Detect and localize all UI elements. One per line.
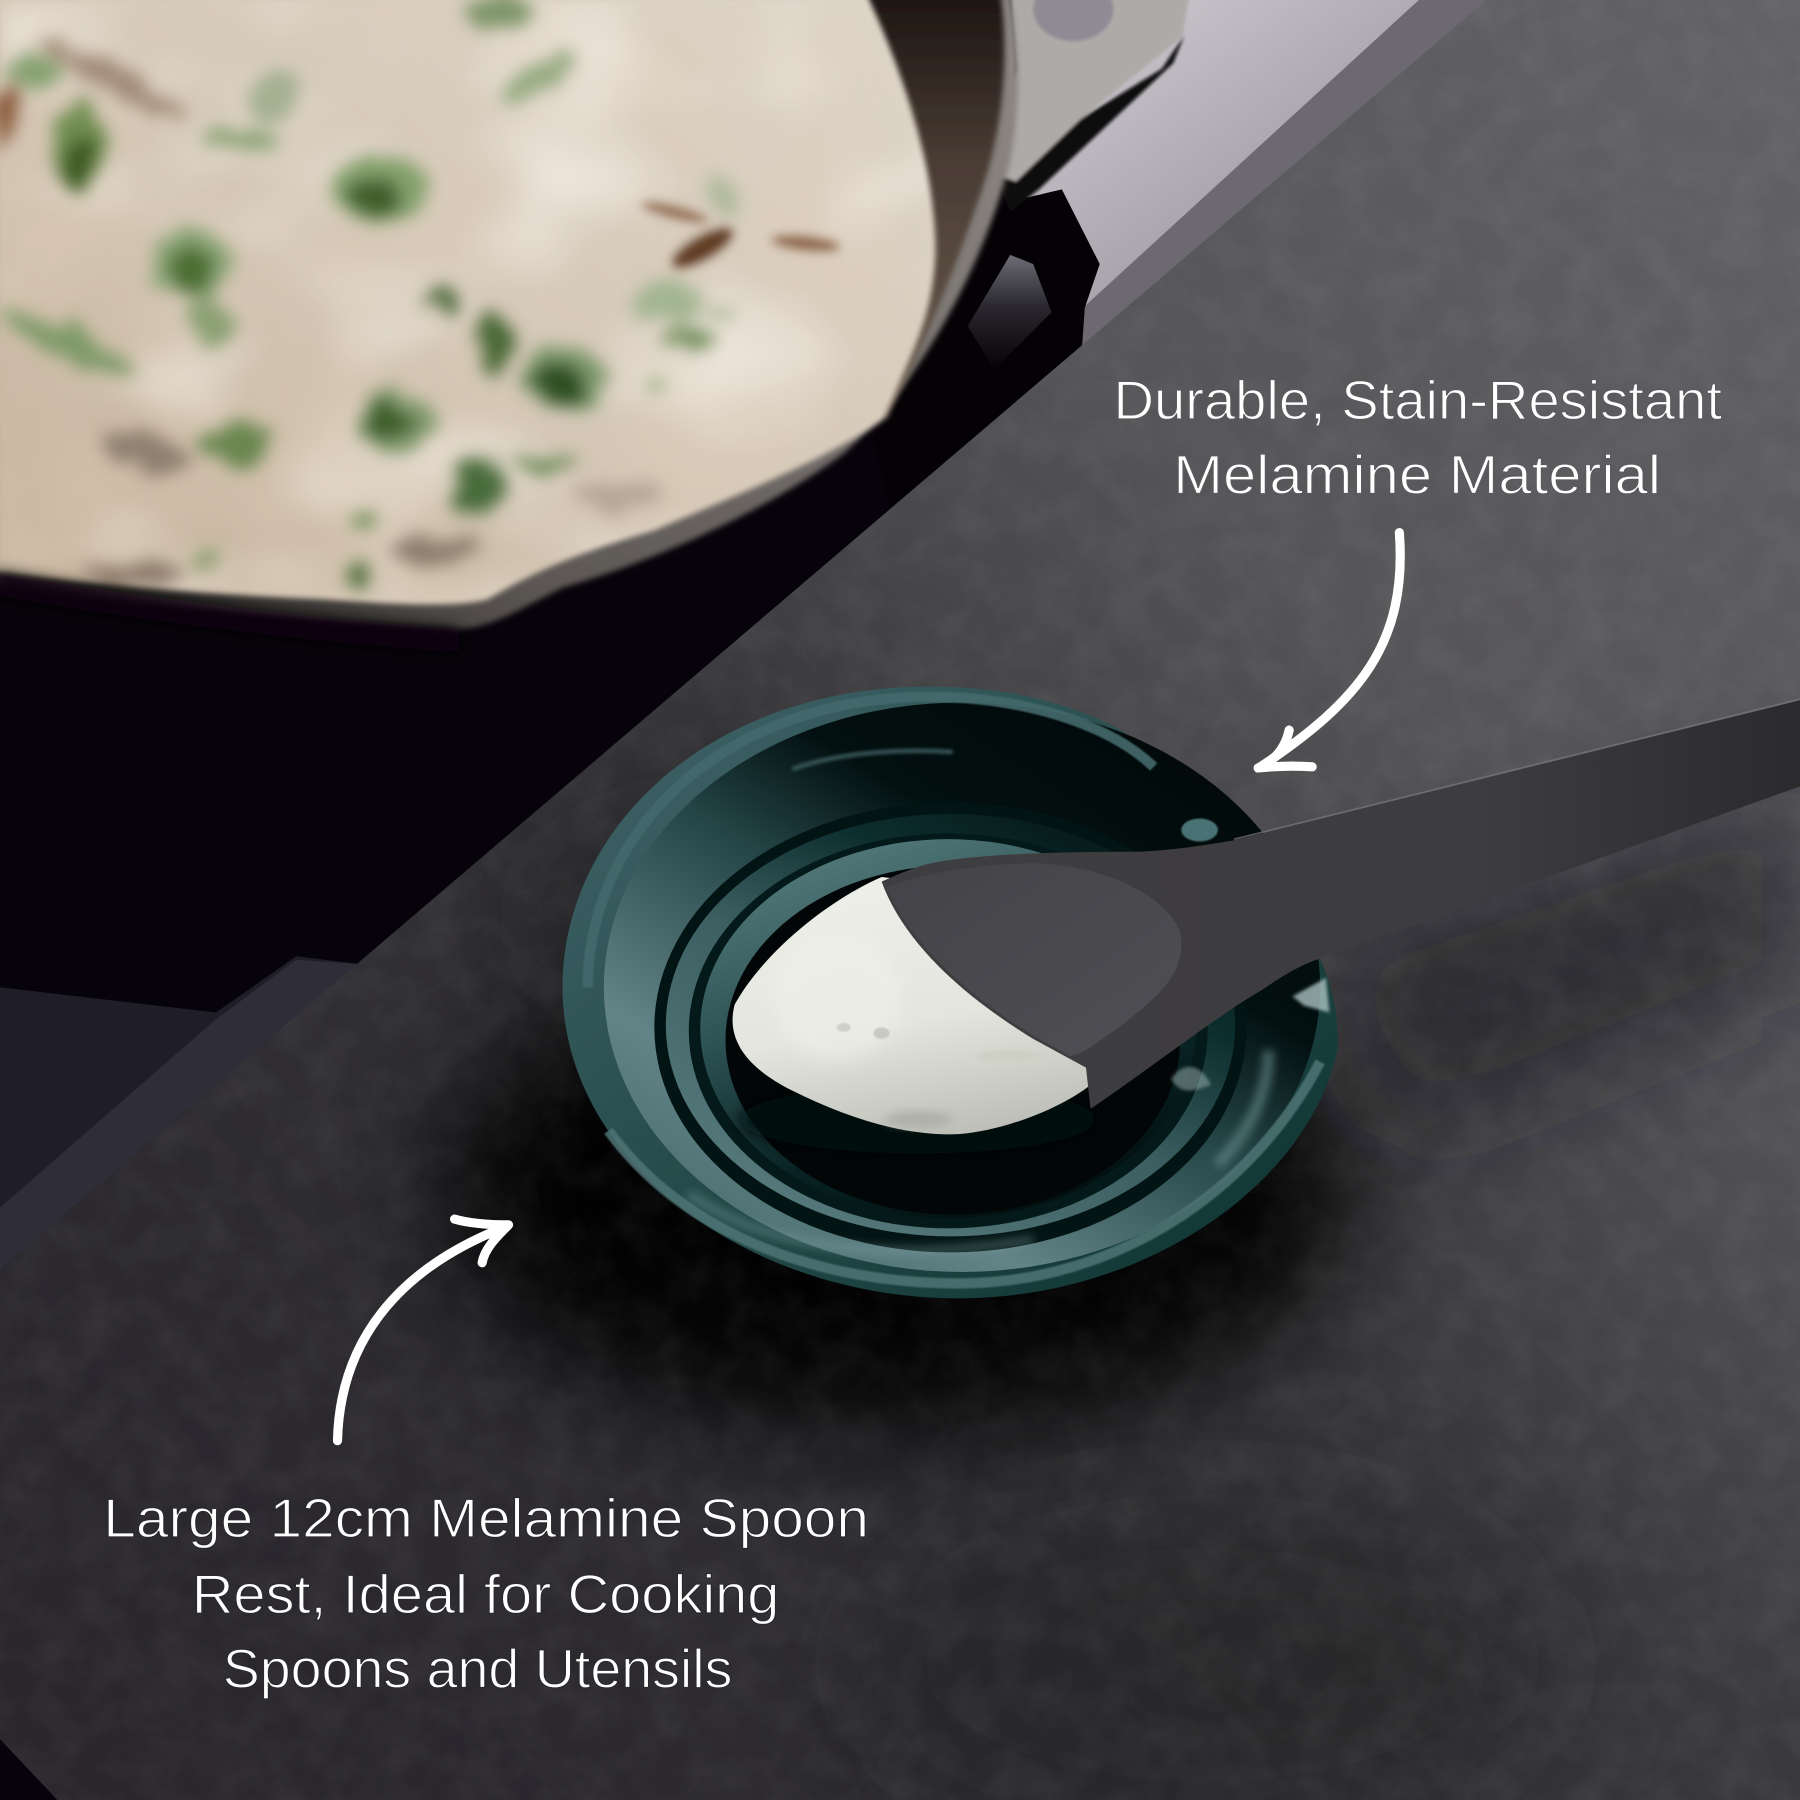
arrow: pointing to dish from top right — [1258, 533, 1400, 768]
callout text line 3: Spoons and Utensils — [223, 1638, 732, 1700]
spoon rest: teal melamine dish — [562, 686, 1338, 1298]
dish outer rim — [562, 686, 1338, 1298]
pan bottom blur edge — [0, 583, 459, 641]
mushroom flecks — [640, 198, 841, 275]
dish inner ridge — [700, 839, 1196, 1218]
spoon handle edge highlight — [1234, 699, 1800, 839]
callout text line 1: Large 12cm Melamine Spoon — [103, 1487, 869, 1549]
pan rim — [0, 0, 1018, 629]
callout text: Durable, Stain-Resistant — [1114, 369, 1722, 431]
dish groove — [654, 802, 1247, 1252]
spoon concave head — [886, 863, 1181, 1056]
pan loop handle, black — [872, 184, 1100, 528]
dish wide highlighted ring — [604, 703, 1320, 1272]
callout text line 2: Rest, Ideal for Cooking — [192, 1563, 779, 1625]
dish dark well — [726, 866, 1180, 1215]
dish thin dark line — [689, 833, 1208, 1228]
glass cooktop strip, upper right — [1010, 0, 1492, 356]
frying pan — [0, 0, 1189, 643]
pan inner wall — [804, 0, 1005, 419]
pan long handle — [990, 0, 1189, 212]
callout: durable material — [1114, 369, 1722, 506]
spoon body — [882, 700, 1800, 1109]
dish mid ring — [666, 814, 1235, 1236]
callout text line 2: Melamine Material — [1173, 444, 1661, 506]
sauce on spoon — [733, 877, 1148, 1154]
dish lower rim sheen — [608, 1062, 1320, 1283]
arrow: pointing to dish from bottom left — [338, 1219, 509, 1441]
spoon with long handle — [882, 699, 1800, 1109]
dish glossy highlights — [689, 751, 1329, 1251]
dish rim light band — [588, 697, 1154, 987]
loop handle window — [968, 255, 1052, 370]
creamy sauce with herbs — [0, 0, 953, 643]
callout: large spoon rest — [103, 1487, 869, 1700]
herb flecks — [0, 0, 742, 591]
cooktop panel, lower left — [0, 956, 362, 1274]
